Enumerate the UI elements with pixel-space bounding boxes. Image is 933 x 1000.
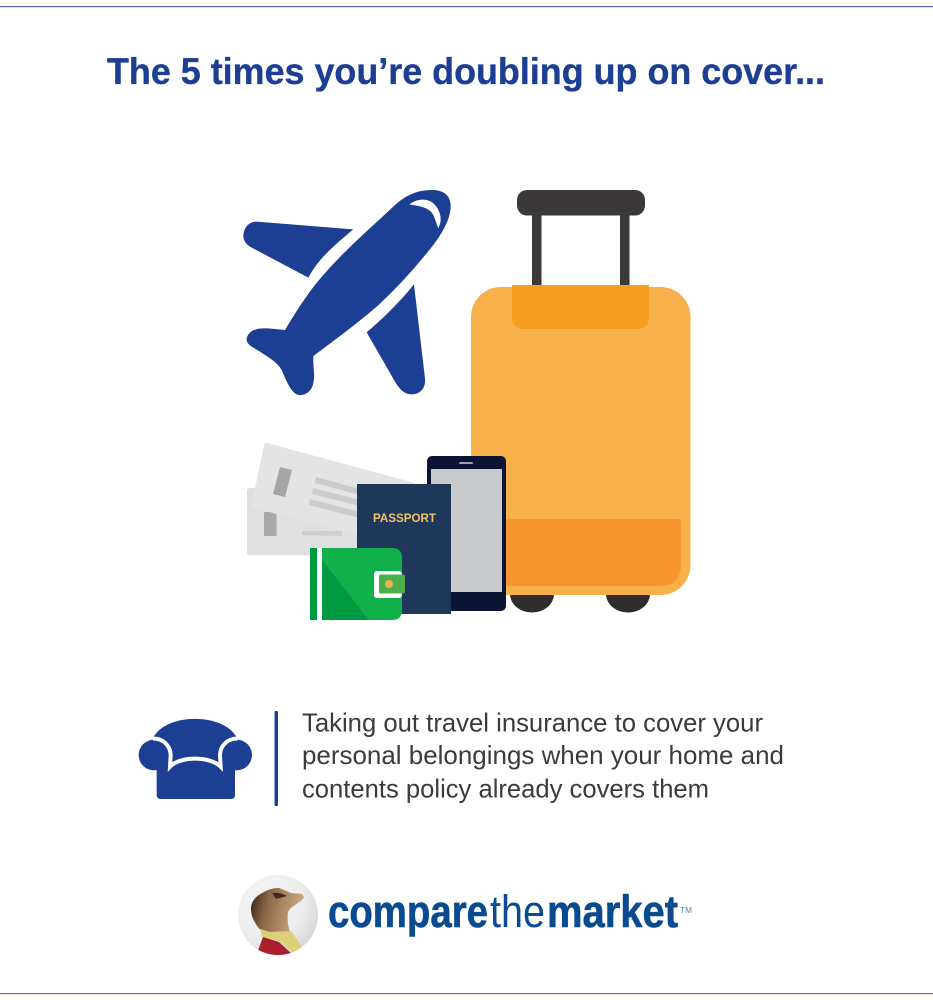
icon: phone [427,456,506,611]
text block: description [302,708,784,804]
icon: passport [357,484,451,614]
trademark: TM [680,906,692,915]
title: The 5 times you’re doubling up on cover... [107,51,825,92]
text block: description: personal belongings when your home and [302,740,784,770]
logo wordmark: market [547,886,678,937]
text block: description: contents policy already covers them [302,774,709,804]
text block: description: Taking out travel insurance to cover your [302,708,763,738]
icon: armchair [139,719,252,799]
divider bar [274,711,278,806]
icon: airplane [243,190,451,395]
logo wordmark: the [490,886,545,937]
icon: meerkat logo badge [238,875,318,960]
icon: wallet [310,548,405,620]
logo wordmark [328,886,678,937]
icon: travel tickets [247,443,415,556]
icon: passport: PASSPORT [373,513,436,525]
icon: suitcase [471,190,690,612]
logo wordmark: compare [328,886,488,937]
